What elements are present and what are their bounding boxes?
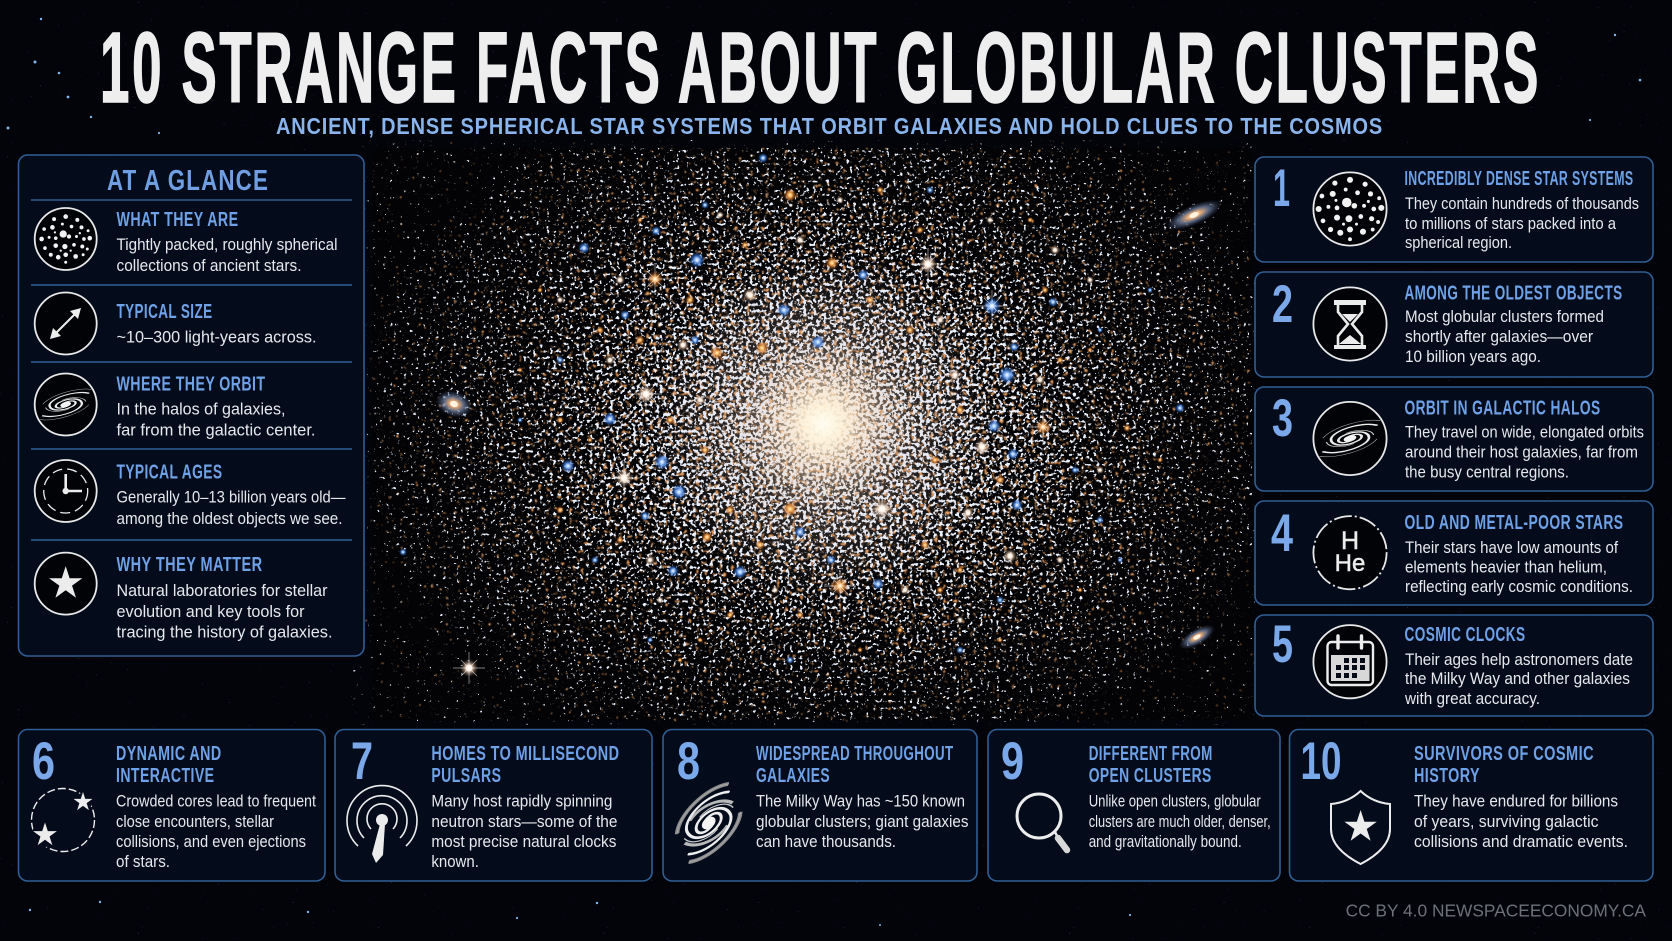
text: fact 4: elements heavier than helium, bbox=[1405, 559, 1607, 577]
text: fact 5 bbox=[1404, 624, 1633, 708]
text: fact 10: HISTORY bbox=[1414, 765, 1480, 787]
number 7: 7 bbox=[351, 732, 373, 791]
what they are: Tightly packed, roughly spherical bbox=[116, 236, 338, 254]
typical size: TYPICAL SIZE bbox=[116, 301, 212, 323]
distant galaxy upper right bbox=[1163, 194, 1225, 236]
text: fact 9: Unlike open clusters, globular bbox=[1089, 793, 1261, 811]
what they are: collections of ancient stars. bbox=[116, 257, 302, 275]
text: fact 7: HOMES TO MILLISECOND bbox=[431, 743, 619, 765]
icon: hydrogen helium: H bbox=[1341, 527, 1359, 555]
text: fact 5: COSMIC CLOCKS bbox=[1404, 624, 1526, 646]
icon: hydrogen helium: He bbox=[1335, 550, 1365, 577]
text: fact 8: can have thousands. bbox=[756, 833, 896, 851]
text: fact 5: Their ages help astronomers date bbox=[1405, 651, 1633, 669]
text: fact 3 bbox=[1404, 398, 1644, 482]
text: fact 6: INTERACTIVE bbox=[116, 765, 214, 787]
text: fact 10: collisions and dramatic events. bbox=[1414, 833, 1628, 851]
text: fact 5: the Milky Way and other galaxies bbox=[1405, 670, 1630, 688]
number 10: 10 bbox=[1300, 732, 1342, 791]
footer credit: CC BY 4.0 NEWSPACEECONOMY.CA bbox=[1346, 901, 1646, 921]
text: fact 2: Most globular clusters formed bbox=[1405, 308, 1604, 326]
panel: fact 2 bbox=[1255, 272, 1653, 377]
number 1: 1 bbox=[1273, 159, 1290, 218]
number 9: 9 bbox=[1001, 732, 1024, 791]
where they orbit: far from the galactic center. bbox=[116, 422, 316, 440]
number 6: 6 bbox=[32, 732, 55, 791]
icon: galaxy bbox=[1313, 402, 1387, 475]
text: fact 10: of years, surviving galactic bbox=[1414, 813, 1598, 831]
text: fact 10 bbox=[1414, 743, 1628, 851]
text: fact 8: WIDESPREAD THROUGHOUT bbox=[756, 743, 954, 765]
why they matter bbox=[116, 554, 332, 642]
icon: dense stars bbox=[1313, 172, 1387, 246]
typical size bbox=[116, 301, 316, 347]
text: fact 5: with great accuracy. bbox=[1404, 690, 1540, 708]
distant galaxy left bbox=[432, 386, 476, 422]
number 5: 5 bbox=[1272, 615, 1293, 674]
text: fact 9: clusters are much older, denser, bbox=[1089, 813, 1271, 831]
text: fact 1: to millions of stars packed into a bbox=[1405, 215, 1617, 233]
text: fact 9: OPEN CLUSTERS bbox=[1089, 765, 1212, 787]
where they orbit: WHERE THEY ORBIT bbox=[116, 374, 266, 396]
text: fact 7: known. bbox=[431, 853, 479, 871]
heading: at a glance: AT A GLANCE bbox=[107, 165, 269, 197]
panel: fact 3 bbox=[1255, 387, 1653, 491]
icon: pulsar bbox=[347, 786, 417, 863]
typical ages bbox=[116, 462, 346, 528]
icon: double arrow bbox=[35, 292, 97, 354]
text: fact 7: most precise natural clocks bbox=[431, 833, 616, 851]
why they matter: evolution and key tools for bbox=[116, 603, 305, 621]
text: fact 6: of stars. bbox=[116, 853, 170, 871]
icon: spiral galaxy bbox=[662, 778, 755, 868]
text: fact 9: and gravitationally bound. bbox=[1089, 833, 1242, 851]
text: fact 9 bbox=[1089, 743, 1271, 851]
icon: galaxy bbox=[35, 374, 97, 436]
why they matter: Natural laboratories for stellar bbox=[116, 582, 328, 600]
panel: at a glance bbox=[18, 155, 364, 656]
text: fact 7 bbox=[431, 743, 619, 871]
icon: hydrogen helium bbox=[1313, 516, 1387, 589]
globular cluster image bbox=[372, 148, 1252, 720]
text: fact 3: the busy central regions. bbox=[1405, 464, 1569, 482]
icon: calendar bbox=[1313, 625, 1387, 698]
text: fact 6 bbox=[116, 743, 316, 871]
text: fact 10: They have endured for billions bbox=[1414, 793, 1618, 811]
text: fact 9: DIFFERENT FROM bbox=[1089, 743, 1213, 765]
text: fact 8: The Milky Way has ~150 known bbox=[756, 793, 965, 811]
text: fact 7: Many host rapidly spinning bbox=[431, 793, 612, 811]
text: fact 1: They contain hundreds of thousands bbox=[1405, 195, 1639, 213]
what they are: WHAT THEY ARE bbox=[116, 209, 238, 231]
number 4: 4 bbox=[1271, 504, 1293, 563]
number 8: 8 bbox=[677, 732, 700, 791]
text: fact 4: reflecting early cosmic conditions. bbox=[1405, 578, 1633, 596]
text: fact 1: spherical region. bbox=[1405, 234, 1512, 252]
panel: fact 6 bbox=[18, 730, 325, 881]
icon: colliding stars bbox=[32, 788, 94, 852]
typical ages: TYPICAL AGES bbox=[116, 462, 222, 484]
text: fact 4 bbox=[1404, 512, 1633, 596]
text: fact 7: neutron stars—some of the bbox=[431, 813, 617, 831]
text: fact 2: shortly after galaxies—over bbox=[1405, 328, 1593, 346]
text: fact 1 bbox=[1404, 168, 1639, 252]
where they orbit bbox=[116, 374, 316, 440]
panel: fact 9 bbox=[988, 730, 1280, 881]
why they matter: tracing the history of galaxies. bbox=[116, 624, 332, 642]
icon: hourglass bbox=[1313, 287, 1387, 361]
panel: fact 1 bbox=[1255, 157, 1653, 262]
panel: fact 7 bbox=[335, 730, 652, 881]
text: fact 3: around their host galaxies, far from bbox=[1405, 444, 1638, 462]
panel: fact 4 bbox=[1255, 501, 1653, 605]
distant galaxy lower right bbox=[1176, 620, 1218, 654]
text: fact 3: They travel on wide, elongated orbits bbox=[1405, 424, 1644, 442]
subtitle: ANCIENT, DENSE SPHERICAL STAR SYSTEMS THAT ORBIT GALAXIES AND HOLD CLUES TO THE COSMOS bbox=[276, 113, 1383, 139]
number 2: 2 bbox=[1272, 275, 1293, 334]
icon: shield bbox=[1331, 791, 1390, 864]
number 3: 3 bbox=[1272, 389, 1293, 448]
panel: fact 10 bbox=[1290, 730, 1653, 881]
what they are bbox=[116, 209, 338, 275]
icon: magnifier bbox=[1017, 794, 1067, 850]
text: fact 8: GALAXIES bbox=[756, 765, 830, 787]
text: fact 6: close encounters, stellar bbox=[116, 813, 274, 831]
text: fact 7: PULSARS bbox=[431, 765, 501, 787]
text: fact 8: globular clusters; giant galaxies bbox=[756, 813, 968, 831]
panel: fact 8 bbox=[662, 730, 977, 881]
why they matter: WHY THEY MATTER bbox=[116, 554, 262, 576]
panel: fact 5 bbox=[1255, 615, 1653, 716]
icon: star bbox=[35, 553, 97, 615]
where they orbit: In the halos of galaxies, bbox=[116, 401, 286, 419]
text: fact 2: 10 billion years ago. bbox=[1405, 348, 1541, 366]
text: fact 10: SURVIVORS OF COSMIC bbox=[1414, 743, 1594, 765]
text: fact 2 bbox=[1404, 282, 1622, 366]
icon: clock bbox=[35, 460, 97, 522]
text: fact 6: collisions, and even ejections bbox=[116, 833, 306, 851]
text: fact 6: Crowded cores lead to frequent bbox=[116, 793, 316, 811]
typical size: ~10–300 light-years across. bbox=[116, 329, 316, 347]
text: fact 4: Their stars have low amounts of bbox=[1405, 539, 1618, 557]
text: fact 8 bbox=[756, 743, 968, 851]
typical ages: among the oldest objects we see. bbox=[116, 510, 342, 528]
icon: star cloud bbox=[35, 208, 97, 270]
text: fact 6: DYNAMIC AND bbox=[116, 743, 222, 765]
typical ages: Generally 10–13 billion years old— bbox=[116, 488, 346, 506]
